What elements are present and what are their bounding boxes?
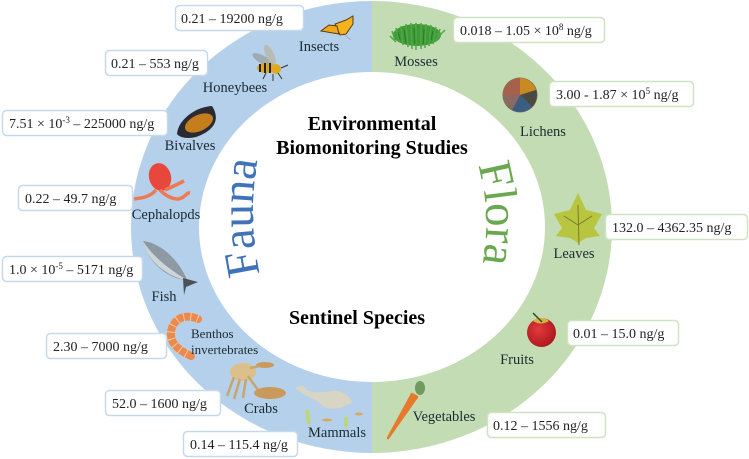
callout: crabs value	[106, 390, 220, 416]
callout: lichens value: 5	[646, 86, 651, 96]
icon: mussel	[177, 106, 216, 138]
icon: butterfly	[321, 16, 353, 40]
callout: lichens value: ng/g	[650, 88, 678, 103]
callout: mosses value: ng/g	[563, 24, 592, 39]
label: Leaves: Leaves	[553, 246, 595, 262]
heading: Flora: Flora	[478, 160, 518, 263]
icon: octopus	[134, 161, 190, 199]
callout: bivalves value	[2, 110, 168, 136]
callout: mosses value	[454, 18, 604, 42]
label: Mosses: Mosses	[394, 54, 438, 70]
callout: lichens value	[550, 82, 694, 106]
callout: fish value: – 5171 ng/g	[63, 263, 133, 278]
callout: mammals value: 0.14 – 115.4 ng/g	[190, 438, 288, 453]
callout: cephalopods value: 0.22 – 49.7 ng/g	[25, 192, 116, 207]
callout: honeybees value	[106, 50, 208, 76]
label: Bivalves: Bivalves	[165, 138, 216, 154]
heading: Fauna: Fauna	[225, 160, 260, 278]
icon: shrimp	[171, 317, 198, 356]
callout: lichens value: 3.00 - 1.87 × 10	[556, 88, 646, 103]
callout: bivalves value: -3	[62, 115, 70, 125]
callout: benthos value: 2.30 – 7000 ng/g	[53, 340, 148, 355]
icon: crab	[227, 362, 286, 399]
callout: bivalves value: 7.51 × 10	[9, 117, 62, 132]
callout: mosses value: 8	[559, 22, 564, 32]
heading: Environmental Biomonitoring Studies: Biomonitoring Studies	[276, 137, 468, 159]
callout: cephalopods value	[18, 186, 132, 210]
callout: benthos value	[46, 334, 166, 358]
icon: apple	[527, 313, 556, 347]
callout: fish value	[2, 256, 142, 282]
callout: crabs value: 52.0 – 1600 ng/g	[112, 397, 207, 412]
label: Vegetables: Vegetables	[413, 409, 476, 425]
callout: honeybees value: 0.21 – 553 ng/g	[111, 57, 199, 72]
panel: flora half of ring	[372, 1, 612, 453]
icon: carrot	[388, 381, 425, 438]
icon: leaf	[554, 193, 602, 245]
label: Fruits: Fruits	[500, 352, 534, 368]
callout: bivalves value: – 225000 ng/g	[70, 117, 154, 132]
label: Honeybees: Honeybees	[203, 80, 268, 96]
callout: leaves value	[606, 214, 748, 240]
callout: vegetables value	[488, 412, 606, 438]
callout: leaves value: 132.0 – 4362.35 ng/g	[612, 221, 731, 236]
icon: fish	[143, 241, 198, 295]
heading: Environmental Biomonitoring Studies: Environmental	[308, 113, 437, 135]
icon: honeybee	[251, 43, 288, 81]
label: Fish: Fish	[152, 289, 177, 305]
panel: fauna half of ring	[131, 1, 372, 453]
callout: mosses value: 0.018 – 1.05 × 10	[460, 24, 559, 39]
label: Benthos invertebrates: invertebrates	[191, 342, 258, 357]
label: Cephalopods: Cephalopds	[132, 207, 201, 223]
callout: insects value	[176, 6, 304, 30]
icon: moss	[390, 23, 445, 50]
callout: vegetables value: 0.12 – 1556 ng/g	[493, 419, 588, 434]
callout: fish value: 1.0 × 10	[9, 263, 55, 278]
callout: fruits value	[568, 320, 678, 346]
label: Crabs: Crabs	[244, 401, 278, 417]
label: Lichens: Lichens	[520, 124, 566, 140]
callout: fruits value: 0.01 – 15.0 ng/g	[573, 327, 664, 342]
label: Mammals: Mammals	[308, 425, 366, 441]
icon: seal	[295, 385, 363, 427]
label: Benthos invertebrates: Benthos	[191, 326, 234, 341]
icon: lichen	[502, 78, 538, 112]
label: Insects: Insects	[299, 39, 339, 55]
callout: mammals value	[184, 432, 298, 456]
callout: insects value: 0.21 – 19200 ng/g	[181, 12, 283, 27]
heading: Sentinel Species: Sentinel Species	[289, 307, 425, 329]
callout: fish value: -5	[55, 261, 63, 271]
